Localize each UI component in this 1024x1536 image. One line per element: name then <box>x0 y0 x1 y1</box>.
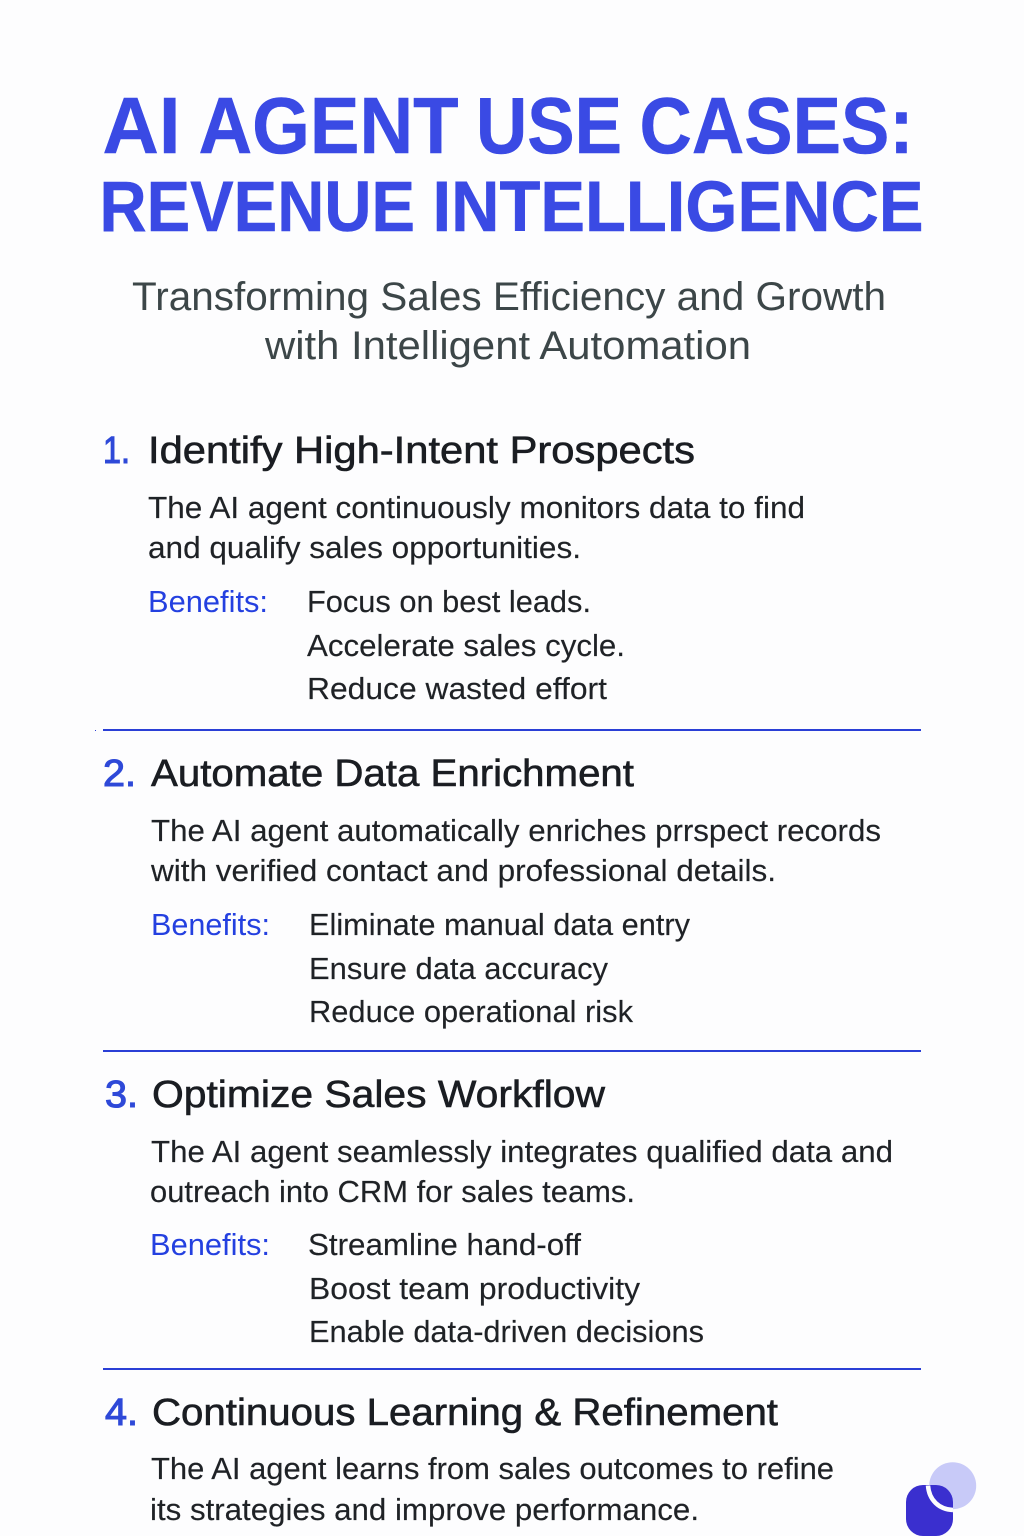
description: use case 1: The AI agent continuously monitors data to find <box>148 490 805 525</box>
description: use case 1 <box>148 490 805 565</box>
panel: use case 3 <box>105 1074 893 1349</box>
benefits label: use case 2: Benefits: <box>151 907 270 942</box>
benefits list: use case 3: Streamline hand-off <box>308 1227 581 1262</box>
description: use case 1: and qualify sales opportunities. <box>148 530 581 565</box>
benefits list: use case 2: Reduce operational risk <box>309 994 633 1029</box>
heading: use case 4: Continuous Learning & Refinement <box>152 1392 778 1434</box>
heading: use case 2: 2. <box>103 753 136 795</box>
subtitle: with Intelligent Automation <box>264 324 751 368</box>
description: use case 2: The AI agent automatically enriches prrspect records <box>151 813 881 848</box>
heading: use case 3: 3. <box>105 1074 138 1116</box>
title <box>100 81 924 247</box>
panel: use case 1 <box>103 430 805 706</box>
description: use case 4: The AI agent learns from sales outcomes to refine <box>151 1451 834 1486</box>
title: REVENUE <box>100 168 415 247</box>
heading: use case 1: 1. <box>103 430 130 472</box>
benefits label: use case 1: Benefits: <box>148 584 268 619</box>
heading: use case 3: Optimize Sales Workflow <box>152 1074 606 1116</box>
heading: use case 1: Identify High-Intent Prospects <box>148 430 695 472</box>
title: USE <box>476 81 622 170</box>
title: AGENT <box>198 81 459 170</box>
benefits list: use case 1: Reduce wasted effort <box>307 671 607 706</box>
benefits list: use case 3: Enable data-driven decisions <box>309 1314 704 1349</box>
title: AI <box>102 81 180 170</box>
title: INTELLIGENCE <box>432 168 924 247</box>
description: use case 4: its strategies and improve performance. <box>150 1492 699 1527</box>
panel: use case 2 <box>103 753 881 1029</box>
benefits list: use case 1 <box>307 584 625 706</box>
heading: use case 4: 4. <box>105 1392 138 1434</box>
benefits list: use case 3: Boost team productivity <box>309 1271 641 1306</box>
benefits list: use case 2: Ensure data accuracy <box>309 951 608 986</box>
subtitle: Transforming Sales Efficiency and Growth <box>132 275 886 319</box>
heading: use case 2: Automate Data Enrichment <box>151 753 634 795</box>
benefits list: use case 1: Accelerate sales cycle. <box>307 628 625 663</box>
description: use case 3: outreach into CRM for sales teams. <box>150 1174 635 1209</box>
icon: logo mark <box>906 1462 976 1536</box>
benefits list: use case 2 <box>309 907 690 1029</box>
subtitle <box>132 275 886 368</box>
title: CASES: <box>640 81 914 170</box>
description: use case 3 <box>150 1134 893 1209</box>
panel: use case 4 <box>105 1392 834 1527</box>
benefits label: use case 3: Benefits: <box>150 1227 270 1262</box>
benefits list: use case 1: Focus on best leads. <box>307 584 591 619</box>
description: use case 2: with verified contact and professional details. <box>150 853 776 888</box>
description: use case 3: The AI agent seamlessly integrates qualified data and <box>151 1134 893 1169</box>
benefits list: use case 2: Eliminate manual data entry <box>309 907 690 942</box>
benefits list: use case 3 <box>308 1227 704 1349</box>
description: use case 2 <box>150 813 881 888</box>
description: use case 4 <box>150 1451 834 1527</box>
